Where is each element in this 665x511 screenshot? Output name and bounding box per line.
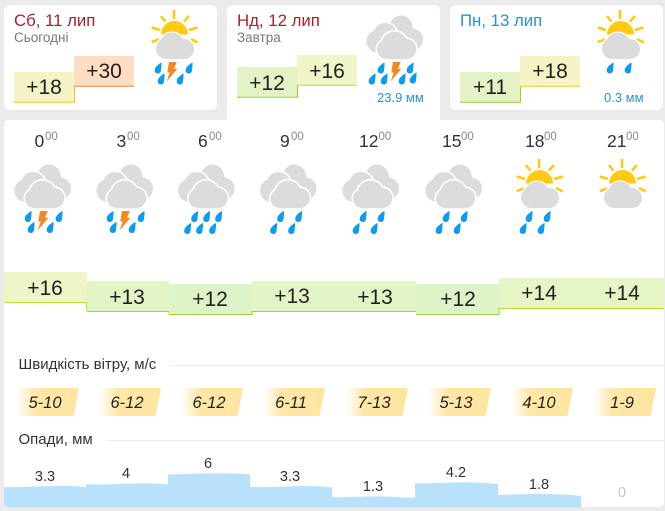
hour labels: 21 [607,131,626,151]
wind speed tags: 5-10 [28,394,62,412]
hour labels: 00 [378,131,391,143]
hour labels: 6 [198,131,208,151]
wind speed tags: 6-12 [192,394,226,412]
precipitation area chart: 3.3 [280,469,300,485]
wind speed tags: 6-11 [275,394,307,412]
wind speed tags: 1-9 [610,394,634,412]
hour labels: 00 [291,131,304,143]
card: today [4,5,217,110]
today min temperature [14,72,75,102]
hour labels: 15 [442,131,461,151]
icon: 15:00 rain [426,164,482,234]
icon: 21:00 sun and cloud [600,159,646,208]
card: day after tomorrow [450,5,663,110]
today label: Сьогодні [14,30,68,45]
precipitation area chart: 4 [122,466,130,482]
hour labels: 0 [34,131,44,151]
tomorrow max temperature [297,55,357,85]
icon: sun cloud storm [152,10,198,85]
third day min temperature: +11 [473,76,507,99]
third day max temperature: +18 [532,60,568,83]
hour labels: 12 [359,131,378,151]
wind heading: Швидкість вітру, м/с [18,356,157,373]
wind speed tags: 6-12 [110,394,144,412]
temperature band: +14 [604,282,640,305]
icon: 09:00 rain [260,164,316,234]
icon: 00:00 storm [14,164,71,233]
wind speed tags: 4-10 [522,394,556,412]
wind speed tags [17,388,656,416]
icon: 03:00 storm [96,164,153,233]
temperature band: +13 [109,286,145,309]
panel: hourly forecast [4,120,664,508]
precipitation area chart: 1.8 [529,477,549,493]
card: tomorrow [227,5,440,130]
hour labels: 00 [626,131,639,143]
hour labels: 00 [45,131,58,143]
today min temperature: +18 [26,76,62,99]
hour labels: 00 [544,131,557,143]
third day max temperature [520,56,580,86]
precipitation area chart: 0 [618,485,626,501]
precipitation area chart: 3.3 [35,469,55,485]
third day min temperature [460,72,521,102]
temperature band [4,272,664,314]
icon: heavy storm cloud [366,16,423,85]
temperature band: +12 [440,288,476,311]
tomorrow min temperature: +12 [249,72,285,95]
today date: Сб, 11 лип [14,11,95,30]
precipitation heading: Опади, мм [18,431,93,448]
tomorrow label: Завтра [237,30,281,45]
tomorrow date: Нд, 12 лип [237,11,320,30]
temperature band: +12 [192,288,228,311]
icon: sun cloud rain [598,10,644,74]
wind speed tags: 7-13 [357,394,391,412]
today max temperature [74,56,134,86]
hour labels: 9 [280,131,290,151]
third day rain amount: 0.3 мм [604,90,644,105]
today max temperature: +30 [86,60,122,83]
third day date: Пн, 13 лип [460,11,542,30]
icon: 12:00 rain [342,164,399,234]
hour labels: 3 [116,131,126,151]
icon: 06:00 heavy rain [178,164,234,234]
temperature band: +13 [357,286,393,309]
icon: 18:00 sun and rain [517,159,563,234]
temperature band: +13 [274,285,310,308]
hour labels: 00 [209,131,222,143]
wind speed tags: 5-13 [439,394,473,412]
precipitation area chart: 4.2 [446,465,466,481]
hour labels: 00 [461,131,474,143]
temperature band: +16 [27,277,63,300]
precipitation area chart: 6 [204,456,212,472]
hour labels: 18 [525,131,544,151]
hour labels [34,131,639,151]
tomorrow rain amount: 23.9 мм [377,90,424,105]
precipitation area chart: 1.3 [363,479,383,495]
tomorrow min temperature [237,67,298,97]
hour labels: 00 [127,131,140,143]
tomorrow max temperature: +16 [309,60,345,83]
temperature band: +14 [521,282,557,305]
precipitation area chart [4,456,626,508]
